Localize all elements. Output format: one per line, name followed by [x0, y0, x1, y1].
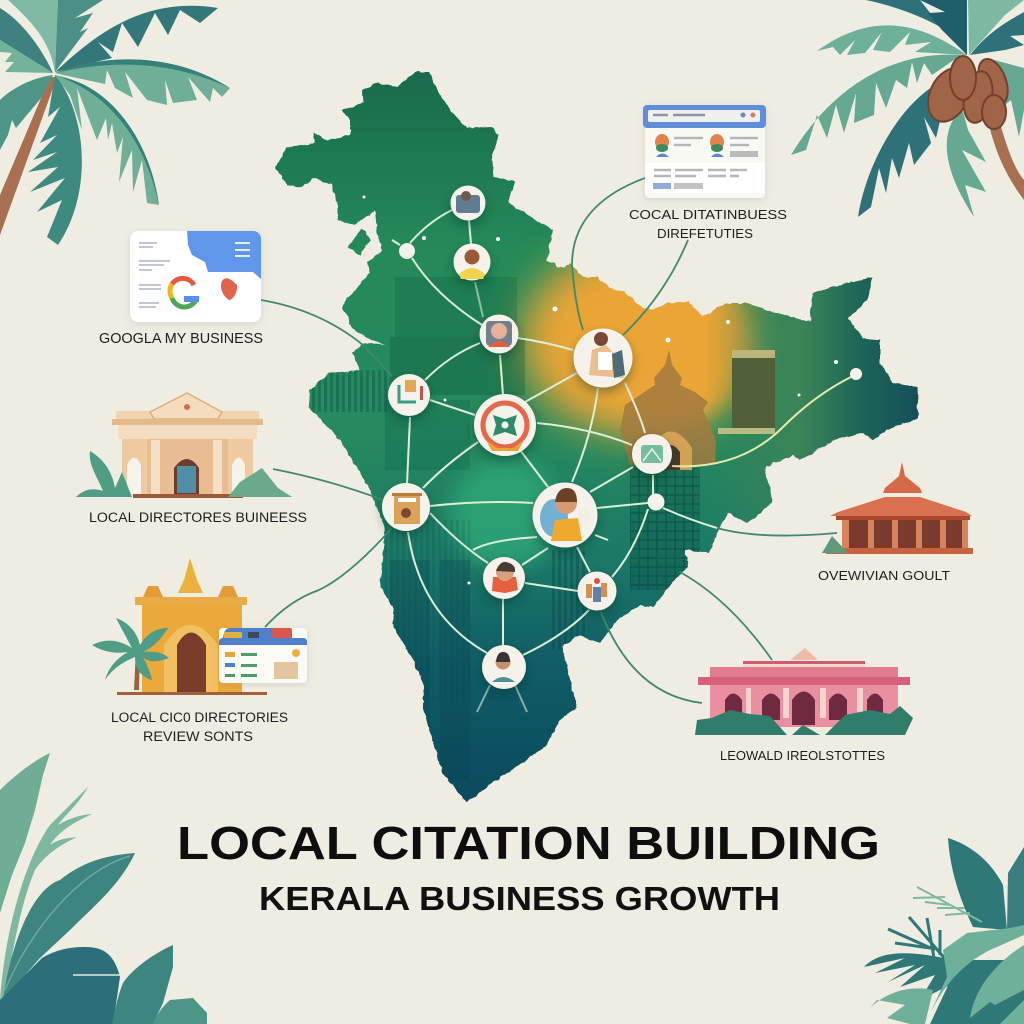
palm small	[134, 650, 140, 690]
foliage: bottom right	[864, 838, 1024, 1024]
node: illustrated person	[574, 328, 632, 388]
node: product box	[382, 483, 430, 531]
card: local business directories	[643, 105, 766, 198]
map of Kerala	[260, 60, 930, 810]
sparkles	[362, 196, 838, 584]
title: LOCAL CITATION BUILDING	[177, 817, 880, 869]
node: people group	[578, 572, 616, 610]
label: directories line two: DIREFETUTIES	[657, 226, 753, 241]
tower silhouette	[732, 350, 775, 428]
illustration: local directory building	[76, 393, 292, 498]
illustration: orange temple and review card	[92, 558, 307, 695]
node: person orange	[483, 557, 525, 599]
building silhouettes	[308, 277, 700, 790]
palm: top right	[791, 0, 1024, 217]
node: person yellow shirt	[454, 244, 490, 280]
label: directories line one: COCAL DITATINBUESS	[629, 207, 787, 222]
icon: Google G	[170, 278, 199, 307]
palm: top left	[0, 0, 230, 245]
label: Local Citation Directories: LOCAL CIC0 DIRECTORIES	[111, 710, 288, 725]
node: top group	[450, 186, 486, 220]
icon: map pin	[221, 278, 237, 300]
label: Government Portal: OVEWIVIAN GOULT	[818, 568, 950, 583]
subtitle: KERALA BUSINESS GROWTH	[259, 880, 780, 917]
connection lines	[392, 210, 851, 712]
label: Local Directories Business: LOCAL DIRECTORES BUINEESS	[89, 510, 307, 525]
node: citation target	[474, 394, 536, 456]
illustration: red pagoda	[822, 462, 973, 554]
node: central person	[532, 482, 598, 548]
node: mail badge	[632, 434, 672, 474]
coconuts	[920, 55, 1013, 129]
label: Review Sites: REVIEW SONTS	[143, 729, 253, 744]
external connector lines	[261, 178, 837, 703]
plants	[76, 451, 132, 497]
card: Google My Business	[130, 231, 261, 322]
label: Google My Business: GOOGLA MY BUSINESS	[99, 331, 263, 347]
label: Local Resources: LEOWALD IREOLSTOTTES	[720, 748, 885, 763]
node: white hub	[648, 494, 664, 510]
node: white hub upper	[399, 243, 415, 259]
node: person teal	[482, 645, 526, 689]
node: green symbols	[388, 374, 430, 416]
illustration: pink heritage building	[695, 648, 913, 735]
temple silhouette	[620, 350, 716, 470]
node: east dot	[850, 368, 862, 380]
foliage: bottom left	[0, 753, 207, 1024]
review card	[219, 628, 307, 683]
node: person red	[480, 314, 518, 354]
